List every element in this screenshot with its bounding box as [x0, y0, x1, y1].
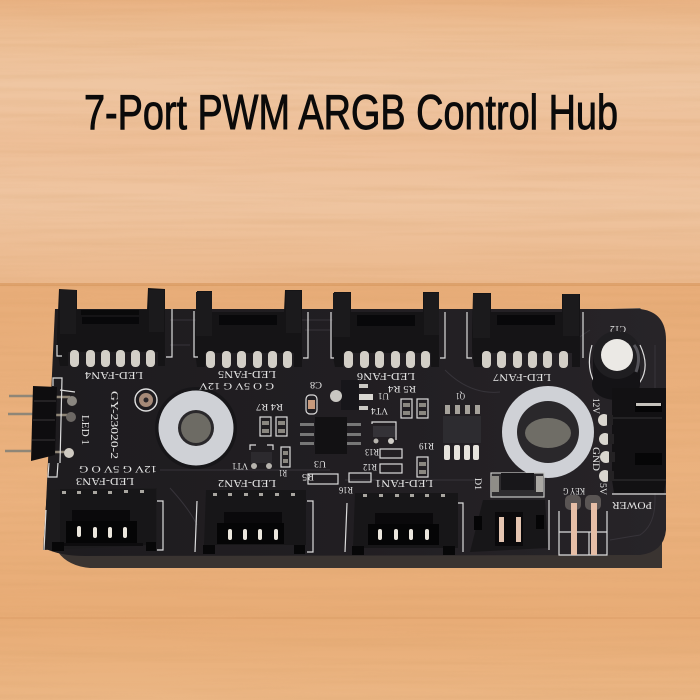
connector: LED-FAN4 — [57, 288, 172, 381]
connector: LED-FAN6: LED-FAN6 — [356, 370, 415, 382]
silk pin labels: U1 — [378, 391, 389, 401]
silk pin labels: C8 — [309, 380, 322, 390]
silk pin labels: R16 — [339, 485, 353, 495]
traces — [160, 320, 655, 540]
foam backing — [58, 540, 662, 568]
connector: LED-FAN7 — [467, 293, 583, 383]
silk pin labels: U3 — [313, 459, 326, 469]
silk pin labels: R13 — [365, 447, 379, 457]
silk pin labels: R1 — [279, 468, 287, 478]
chip U3 — [300, 417, 361, 454]
transistor U1 — [330, 380, 373, 410]
board model label: GY-23020-2 — [108, 391, 120, 459]
connector: LED-FAN2: LED-FAN2 — [218, 477, 276, 489]
capacitor — [589, 331, 645, 400]
silk pin labels: Q1 — [456, 391, 465, 401]
silk pin labels: GND — [591, 447, 601, 472]
connector: LED-FAN1 — [345, 477, 463, 555]
connector: LED-FAN3 — [43, 475, 163, 551]
silk pin labels: 5V — [598, 483, 608, 496]
board outline — [44, 309, 666, 556]
silk pin labels: 12V G 5V O G — [78, 464, 157, 474]
silk pin labels: R19 — [419, 441, 434, 451]
silk pin labels: 12V — [591, 398, 601, 415]
resistors — [260, 395, 428, 484]
silk pin labels: R12 — [363, 462, 377, 472]
connector: LED-FAN4: LED-FAN4 — [84, 369, 143, 381]
silk pin labels: C12 — [610, 324, 626, 334]
silk pin labels: R4 R7 — [255, 402, 283, 412]
silk pin labels: R5 — [301, 472, 314, 482]
connector: LED-FAN3: LED-FAN3 — [75, 475, 134, 487]
connector: LED-FAN5: LED-FAN5 — [217, 368, 276, 380]
connector: fan tach D1 — [470, 500, 549, 552]
power connector — [598, 388, 666, 511]
connector: LED 1 header: LED 1 — [79, 415, 91, 445]
silk pin labels: VT4 — [370, 406, 388, 416]
test pad — [135, 389, 157, 411]
mounting washer left — [155, 387, 237, 469]
circuit board — [5, 288, 666, 568]
silk pin labels: KEY G — [563, 486, 585, 496]
connector: LED 1 header — [5, 378, 91, 477]
chip Q1 — [443, 405, 481, 460]
connector: LED-FAN7: LED-FAN7 — [492, 371, 551, 383]
connector: LED-FAN6 — [331, 292, 445, 382]
silk pin labels: R5 R4 — [387, 384, 416, 394]
diode D1 — [491, 473, 544, 497]
power connector: POWER — [611, 499, 652, 511]
silk pin labels: G O 5V G 12V — [198, 381, 274, 391]
transistors VT1 and VT4 — [250, 422, 396, 469]
connector: LED-FAN1: LED-FAN1 — [375, 477, 433, 489]
mounting washer right — [502, 386, 594, 478]
silk pin labels: D1 — [473, 478, 483, 490]
connector: LED-FAN2 — [195, 477, 313, 554]
silk pin labels: VT1 — [232, 461, 248, 471]
silk pin labels — [78, 324, 626, 496]
connector: LED-FAN5 — [194, 290, 308, 380]
key pin header — [559, 495, 607, 555]
